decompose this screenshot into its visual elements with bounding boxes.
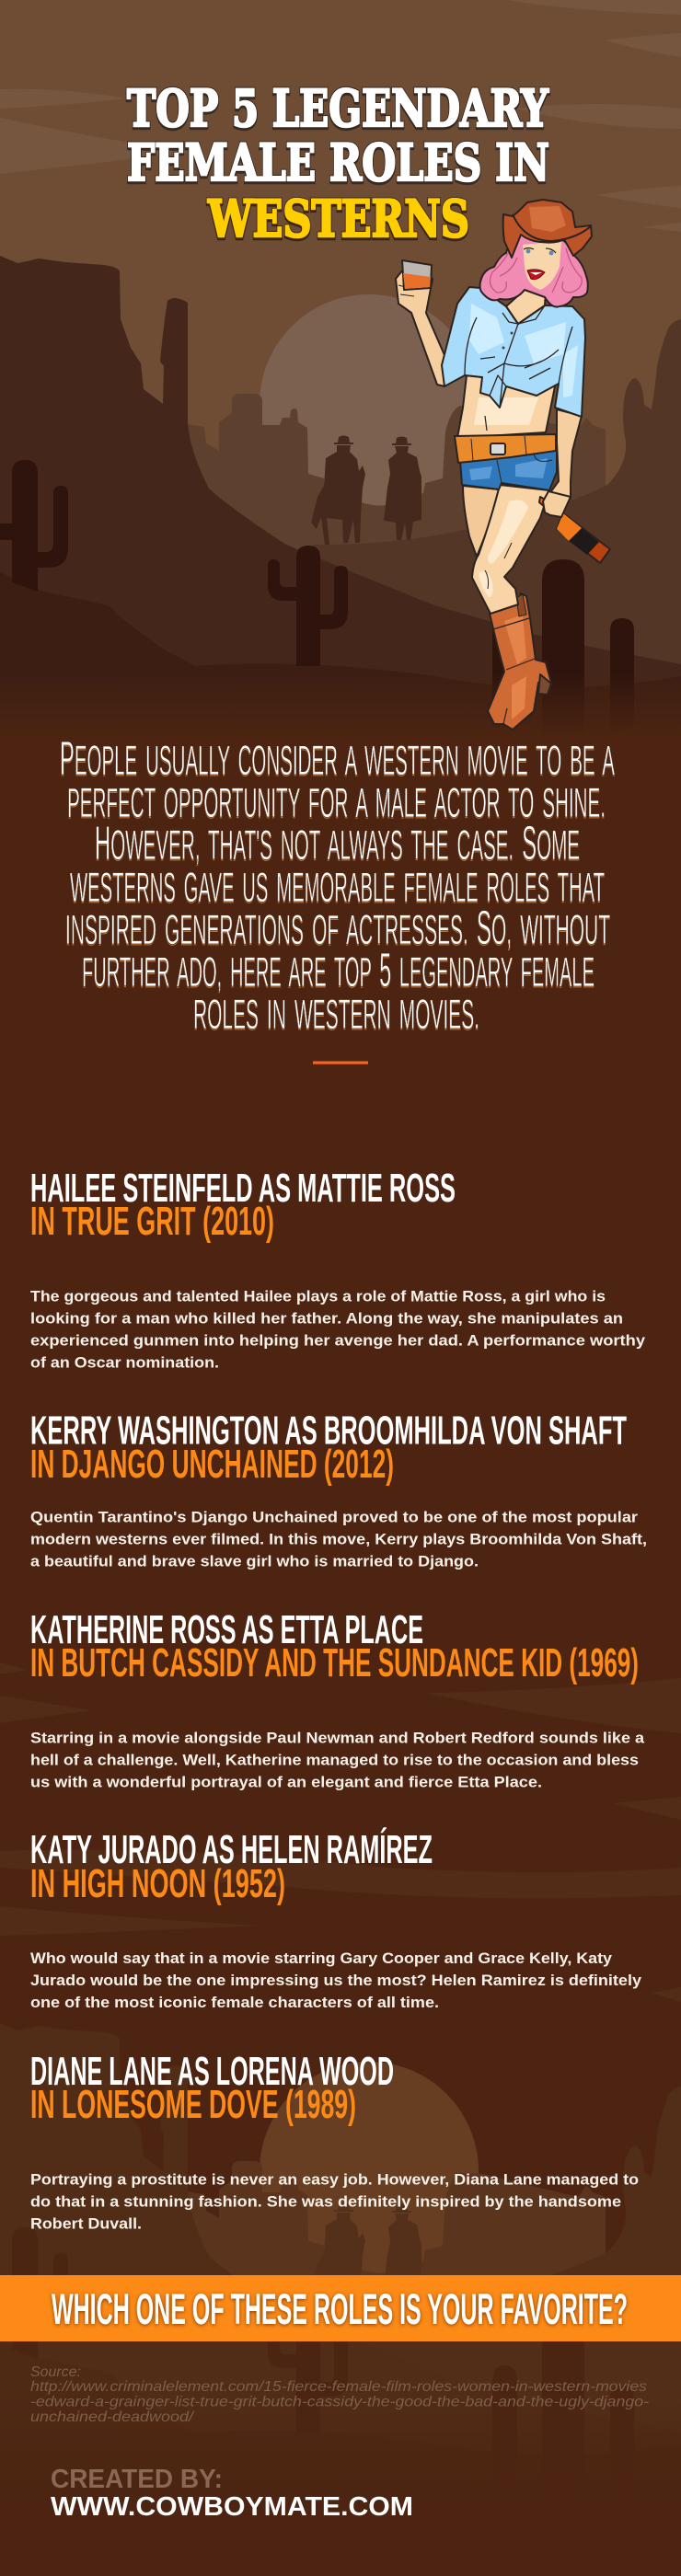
section 1: Hailee Steinfeld: experienced gunmen into helping her avenge her dad. A performance worthy <box>30 1332 646 1349</box>
hair <box>480 234 588 307</box>
created by: CREATED BY: <box>51 2465 223 2494</box>
title: TOP 5 LEGENDARY <box>127 78 549 138</box>
section 2: Kerry Washington: modern westerns ever filmed. In this move, Kerry plays Broomhilda Von Shaft, <box>30 1531 647 1547</box>
bottle <box>539 497 610 563</box>
section 1: Hailee Steinfeld <box>30 1166 646 1371</box>
created by <box>51 2465 413 2522</box>
hat <box>503 200 592 258</box>
lower background clouds <box>0 1662 681 2002</box>
raised arm <box>396 270 444 386</box>
sky clouds <box>0 0 681 232</box>
boot heel <box>538 674 551 695</box>
title: WESTERNS <box>207 189 469 248</box>
call-to-action band <box>0 2275 681 2341</box>
section 3: Katherine Ross: hell of a challenge. Well, Katherine managed to rise to the occasion and bless <box>30 1752 639 1768</box>
source: Source: <box>30 2364 81 2380</box>
illustration: cowgirl with glass and bottle <box>396 200 610 730</box>
hand holding bottle <box>543 491 571 517</box>
section 5: Diane Lane: Robert Duvall. <box>30 2215 142 2232</box>
section 4: Katy Jurado: IN HIGH NOON (1952) <box>30 1861 285 1906</box>
section 5: Diane Lane: IN LONESOME DOVE (1989) <box>30 2082 356 2127</box>
neck and chest <box>506 290 546 324</box>
source: http://www.criminalelement.com/15-fierce-female-film-roles-women-in-western-movies <box>30 2379 647 2395</box>
fade of scene into page colour <box>0 672 681 738</box>
created by: WWW.COWBOYMATE.COM <box>51 2492 413 2522</box>
section 4: Katy Jurado: Who would say that in a movie starring Gary Cooper and Grace Kelly, Katy <box>30 1949 613 1967</box>
section 5: Diane Lane: DIANE LANE AS LORENA WOOD <box>30 2049 394 2094</box>
section 2: Kerry Washington: Quentin Tarantino's Django Unchained proved to be one of the most popular <box>30 1509 638 1525</box>
title: WESTERNS <box>207 189 469 248</box>
title: TOP 5 LEGENDARY <box>127 78 549 138</box>
source: unchained-deadwood/ <box>30 2409 195 2425</box>
desert scene: sun, buttes, riders and cacti <box>0 256 681 736</box>
header sky <box>0 0 681 736</box>
footer scene fade <box>0 2392 681 2512</box>
torso <box>457 375 555 438</box>
section 1: Hailee Steinfeld: The gorgeous and talented Hailee plays a role of Mattie Ross, a girl who is <box>30 1288 606 1305</box>
section 2: Kerry Washington: IN DJANGO UNCHAINED (2012) <box>30 1442 394 1487</box>
right arm <box>548 409 582 499</box>
boot <box>488 593 551 730</box>
section 3: Katherine Ross: Starring in a movie alongside Paul Newman and Robert Redford sounds like a <box>30 1730 645 1746</box>
section 1: Hailee Steinfeld: looking for a man who killed her father. Along the way, she manipulates an <box>30 1310 623 1327</box>
section 3: Katherine Ross: us with a wonderful portrayal of an elegant and fierce Etta Place. <box>30 1774 542 1790</box>
intro paragraph <box>60 732 615 1038</box>
title: FEMALE ROLES IN <box>127 132 549 192</box>
left leg <box>463 486 499 557</box>
section 1: Hailee Steinfeld: of an Oscar nomination. <box>30 1354 219 1371</box>
section 1: Hailee Steinfeld: IN TRUE GRIT (2010) <box>30 1199 274 1244</box>
shorts <box>460 449 557 490</box>
title <box>127 78 549 248</box>
shirt <box>442 287 585 417</box>
section 4: Katy Jurado <box>30 1826 642 2011</box>
title: FEMALE ROLES IN <box>127 132 549 192</box>
section 4: Katy Jurado: Jurado would be the one impressing us the most? Helen Ramirez is definitely <box>30 1972 642 1989</box>
belt <box>455 434 556 463</box>
faded desert scene behind footer <box>0 2023 681 2503</box>
source: -edward-a-grainger-list-true-grit-butch-cassidy-the-good-the-bad-and-the-ugly-django- <box>30 2394 649 2410</box>
section 5: Diane Lane <box>30 2049 639 2232</box>
face <box>523 241 561 290</box>
section 3: Katherine Ross <box>30 1607 645 1790</box>
section 2: Kerry Washington <box>30 1408 647 1570</box>
glass <box>402 260 432 290</box>
section 4: Katy Jurado: one of the most iconic female characters of all time. <box>30 1994 439 2011</box>
section 5: Diane Lane: Portraying a prostitute is never an easy job. However, Diana Lane managed to <box>30 2171 639 2188</box>
front leg <box>472 485 549 614</box>
section 5: Diane Lane: do that in a stunning fashion. She was definitely inspired by the handsome <box>30 2193 621 2210</box>
section 2: Kerry Washington: a beautiful and brave slave girl who is married to Django. <box>30 1553 479 1570</box>
divider <box>313 1062 368 1064</box>
source <box>30 2364 649 2425</box>
